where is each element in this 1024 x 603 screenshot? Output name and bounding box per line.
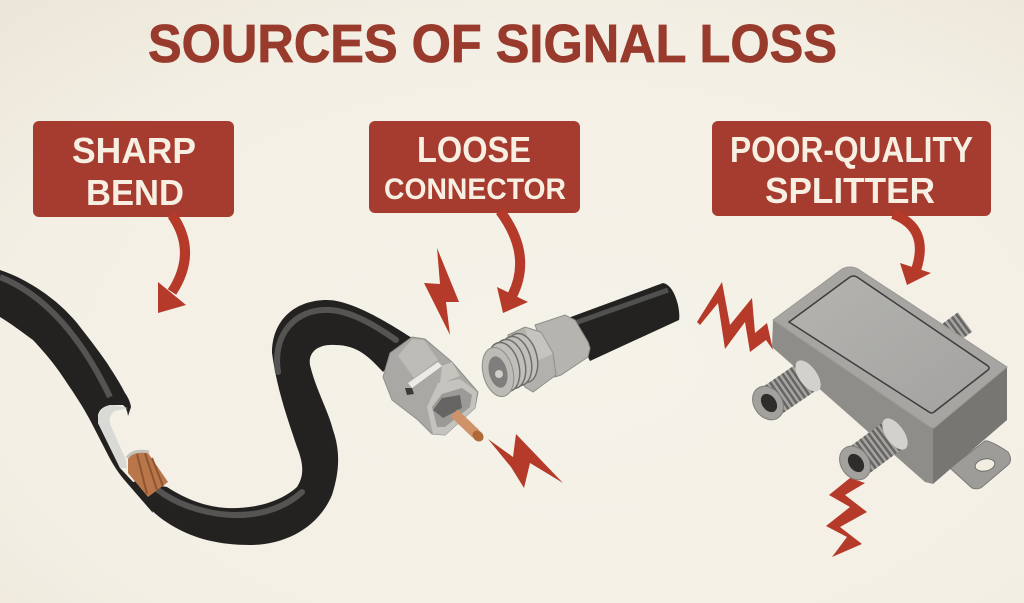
right face: [933, 367, 1007, 484]
label: sharp bend: SHARP: [72, 130, 196, 171]
label: poor-quality splitter: POOR-QUALITY: [730, 129, 973, 170]
inner panel: [789, 276, 989, 413]
splitter noise zigzag: left: [697, 282, 773, 352]
splitter noise zigzag: bottom: [826, 478, 867, 557]
connector face: [427, 379, 477, 435]
spark: lower connector: [488, 434, 563, 488]
spark: upper connector: [424, 248, 459, 335]
port right: [833, 414, 913, 486]
threads: [501, 330, 543, 386]
label: loose connector: [369, 121, 580, 213]
back port: [946, 322, 965, 336]
hex nut: [508, 327, 556, 392]
cable: exposed copper braid: [127, 451, 168, 497]
face: [477, 344, 519, 400]
label: sharp bend: BEND: [86, 172, 184, 213]
arrow: loose connector: [497, 211, 528, 313]
front face: [772, 320, 933, 484]
label: loose connector: CONNECTOR: [384, 173, 566, 206]
cable: left section with cut jacket: [0, 270, 153, 513]
mounting tab: [950, 441, 1010, 489]
port left: [746, 356, 826, 426]
arrow: sharp bend: [158, 215, 186, 313]
label: loose connector: LOOSE: [417, 129, 531, 170]
arrow: splitter: [893, 214, 931, 285]
cable: S-curve section: [130, 300, 412, 545]
top face: [773, 267, 1007, 428]
connector: left male fitting: [383, 337, 486, 444]
cable stub: [568, 283, 679, 361]
copper pin: [454, 413, 476, 434]
rear collar: [535, 315, 590, 377]
label: poor-quality splitter: SPLITTER: [765, 170, 935, 211]
splitter device: [746, 267, 1010, 489]
title: SOURCES OF SIGNAL LOSS: [148, 14, 837, 74]
white dielectric: [98, 405, 128, 468]
connector: right threaded fitting with cable: [477, 283, 679, 400]
label: poor-quality splitter: [712, 121, 991, 216]
label: sharp bend: [33, 121, 234, 217]
